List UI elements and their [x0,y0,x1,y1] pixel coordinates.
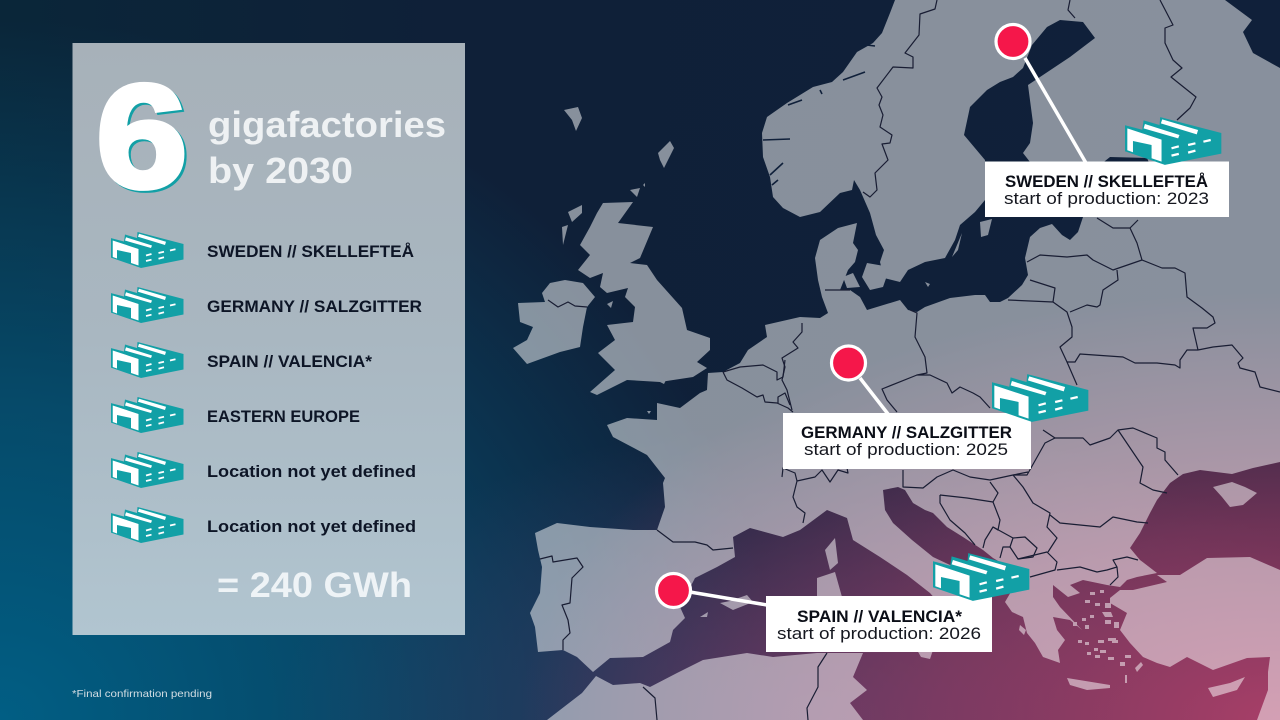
mainland Europe [530,0,1280,672]
callout: Germany [783,413,1031,469]
North Africa [547,653,867,720]
Turkey [1110,557,1280,720]
callout: Sweden: start of production: 2023 [1004,190,1209,208]
callout: Germany: GERMANY // SALZGITTER [801,424,1012,442]
pin: Germany [832,346,888,414]
heading: gigafactories [208,104,446,145]
row: Sweden: SWEDEN // SKELLEFTEÅ [207,242,414,261]
row: location undefined 1 [110,452,416,488]
callout: Sweden [985,162,1229,217]
icon: factory Sweden [1125,117,1222,165]
panel: gigafactory list [72,43,465,635]
icon: factory Germany [992,374,1088,422]
row: Germany: GERMANY // SALZGITTER [207,298,422,316]
total capacity: = 240 GWh [217,566,412,605]
land masses [513,0,1280,720]
row: Spain [110,342,373,378]
row: Spain: SPAIN // VALENCIA* [207,353,373,371]
heading: by 2030 [208,150,353,191]
pin: Sweden [996,24,1086,163]
row: Eastern Europe [110,397,360,433]
islands [562,107,1245,697]
fjords and inlets [763,44,875,185]
callout: Sweden: SWEDEN // SKELLEFTEÅ [1005,172,1208,191]
Ireland [513,280,595,364]
big number 6: 6 [96,55,188,219]
callout: Spain [766,596,992,652]
row: location undefined 1: Location not yet defined [207,463,416,481]
footnote: *Final confirmation pending [72,688,212,700]
row: Germany [110,287,422,323]
icon: factory Spain [933,553,1030,601]
pin: Spain [656,574,767,608]
heading [208,104,446,191]
row: Eastern Europe: EASTERN EUROPE [207,408,360,426]
callout: Spain: start of production: 2026 [777,625,981,643]
Great Britain [578,202,710,395]
callout: Spain: SPAIN // VALENCIA* [797,608,963,626]
callout: Germany: start of production: 2025 [804,441,1008,459]
country borders [540,0,1280,720]
row: location undefined 2 [110,507,416,543]
row: location undefined 2: Location not yet defined [207,518,416,536]
row: Sweden [110,232,414,268]
Crimea [1213,482,1257,507]
big number 6: 6 [98,57,190,221]
